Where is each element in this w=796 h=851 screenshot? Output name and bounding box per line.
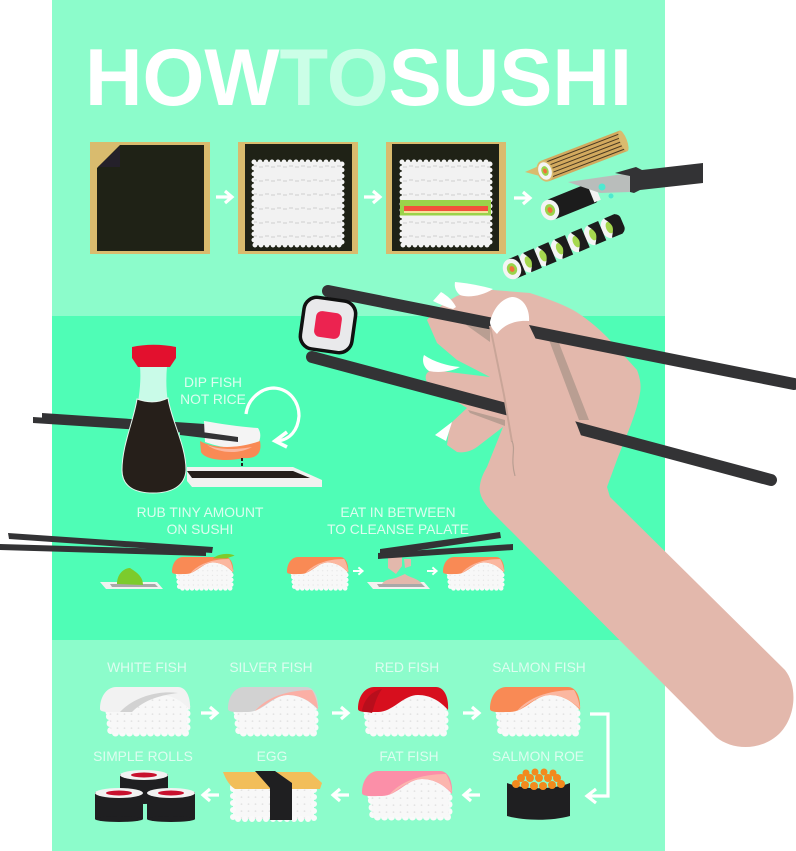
label: red fish: RED FISH: [375, 660, 439, 675]
index finger: [489, 297, 585, 476]
step 2: rice on nori: [238, 142, 358, 254]
sliced roll: [500, 212, 627, 282]
ginger plate: [367, 556, 430, 589]
dipped sushi: [180, 421, 260, 460]
label: simple rolls: SIMPLE ROLLS: [93, 749, 193, 764]
chopsticks behind soy bottle: [33, 413, 205, 434]
sushi: fat fish: [362, 771, 452, 817]
sushi: salmon roe: [507, 768, 570, 820]
sushi: white fish: [100, 687, 190, 733]
chopsticks with wasabi: [0, 533, 213, 556]
bracket arrow: [587, 714, 608, 803]
label: salmon fish: SALMON FISH: [492, 660, 586, 675]
label: salmon roe: SALMON ROE: [492, 749, 584, 764]
nori roll being cut: [538, 181, 601, 223]
arrow: [463, 707, 479, 719]
arrow: [333, 789, 349, 801]
rolled bamboo mat: [525, 129, 631, 184]
panel: how to eat: [52, 316, 665, 640]
panel: order of eating: [52, 640, 665, 851]
sushi: silver fish: [228, 687, 318, 733]
curved arrow: [246, 388, 299, 447]
sushi: simple rolls: [95, 770, 195, 822]
arrow: [332, 707, 348, 719]
sushi roll piece held: [299, 296, 357, 354]
label: eat in between to cleanse palate: TO CLEANSE PALATE: [327, 522, 469, 537]
sushi: salmon fish: [490, 687, 580, 733]
label: rub tiny amount on sushi: RUB TINY AMOUNT: [137, 505, 264, 520]
sushi with wasabi: [172, 554, 235, 588]
soy sauce dish: [187, 467, 322, 487]
arrow: [464, 789, 480, 801]
label: fat fish: FAT FISH: [379, 749, 439, 764]
soy sauce drips: [241, 458, 243, 470]
step 1: nori on bamboo mat: [90, 142, 210, 254]
chopsticks with ginger: [378, 532, 513, 559]
label: silver fish: SILVER FISH: [229, 660, 313, 675]
label: white fish: WHITE FISH: [107, 660, 187, 675]
small arrow: [427, 567, 437, 575]
soy sauce bottle: [122, 345, 186, 493]
label: eat in between to cleanse palate: EAT IN BETWEEN: [340, 505, 456, 520]
step 3: filling on rice: [386, 142, 506, 254]
fingernails: [423, 282, 493, 441]
label: egg: EGG: [257, 749, 287, 764]
sushi after ginger: [443, 557, 504, 588]
small arrow: [353, 567, 363, 575]
arrow: [201, 707, 217, 719]
arrow: [203, 789, 219, 801]
arrow: [364, 191, 380, 203]
arrow: [216, 191, 232, 203]
knife: [568, 163, 703, 198]
sushi: red fish: [358, 687, 448, 733]
panel: making the roll: [52, 0, 665, 316]
top chopstick: [328, 291, 794, 384]
label: rub tiny amount on sushi: ON SUSHI: [167, 522, 233, 537]
bottom chopstick: [312, 357, 771, 480]
chopstick shadows: [462, 322, 589, 426]
sushi: egg: [223, 771, 322, 820]
title: HOWTOSUSHI: [85, 33, 632, 123]
sushi before ginger: [287, 557, 348, 588]
label: dip fish not rice: NOT RICE: [180, 392, 246, 407]
hand and arm: [426, 290, 793, 747]
label: dip fish not rice: DIP FISH: [184, 375, 242, 390]
arrow: [514, 192, 530, 204]
wasabi plate: [100, 568, 163, 589]
